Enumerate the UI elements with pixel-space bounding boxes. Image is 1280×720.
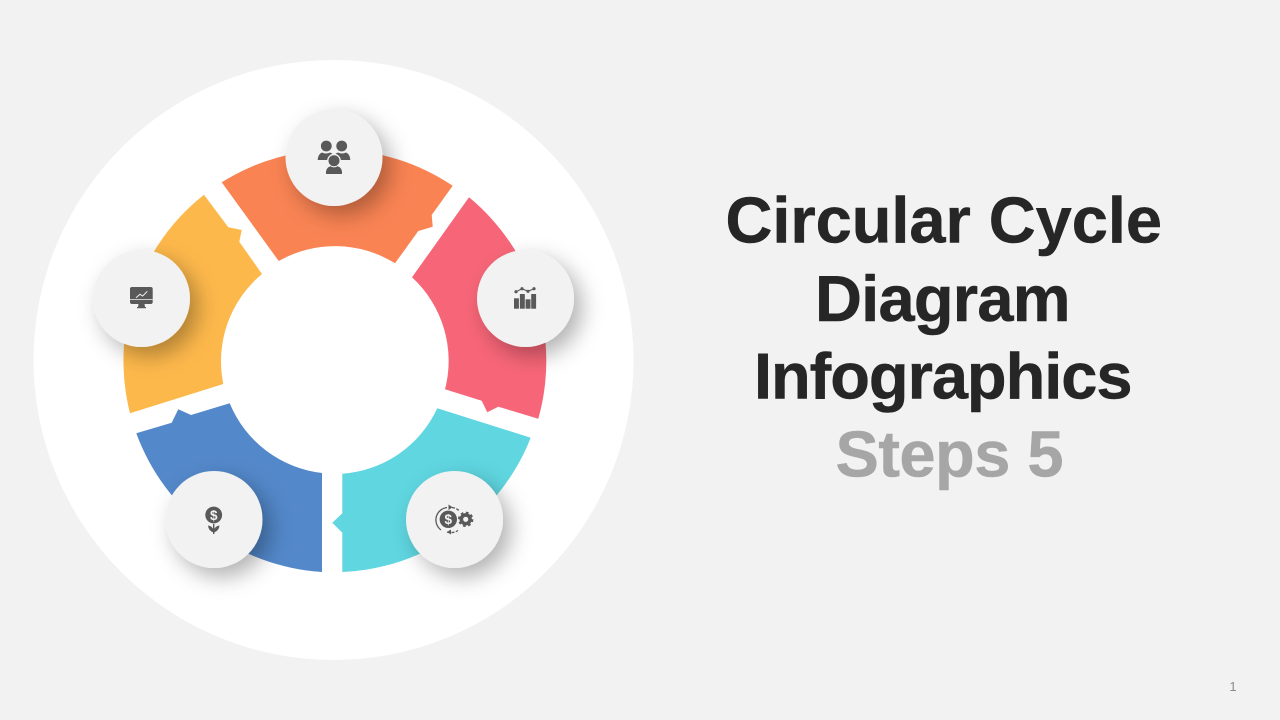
icon: dollar cycle with gear: $ bbox=[445, 512, 453, 527]
title bbox=[726, 183, 1162, 491]
node: monitor bbox=[93, 250, 190, 347]
node: people bbox=[286, 109, 382, 206]
icon: dollar flower: $ bbox=[210, 508, 218, 523]
title: Circular Cycle bbox=[726, 183, 1162, 256]
white backing circle bbox=[34, 60, 634, 660]
segment: orange bbox=[222, 150, 453, 263]
node: money and gear bbox=[406, 471, 503, 568]
icon: monitor with growth line bbox=[130, 287, 153, 308]
segment: yellow bbox=[123, 195, 262, 413]
node: money plant bbox=[166, 471, 262, 568]
segment: teal bbox=[332, 408, 531, 572]
icon: people bbox=[318, 141, 350, 174]
page number: 1 bbox=[1229, 679, 1237, 694]
segment: blue bbox=[136, 403, 322, 572]
title: Diagram bbox=[815, 262, 1070, 335]
subtitle: Steps 5 bbox=[836, 418, 1064, 491]
segment: red bbox=[412, 197, 546, 419]
node: chart bbox=[477, 250, 574, 347]
icon: bar chart with trend line bbox=[514, 287, 536, 309]
title: Infographics bbox=[754, 339, 1132, 412]
